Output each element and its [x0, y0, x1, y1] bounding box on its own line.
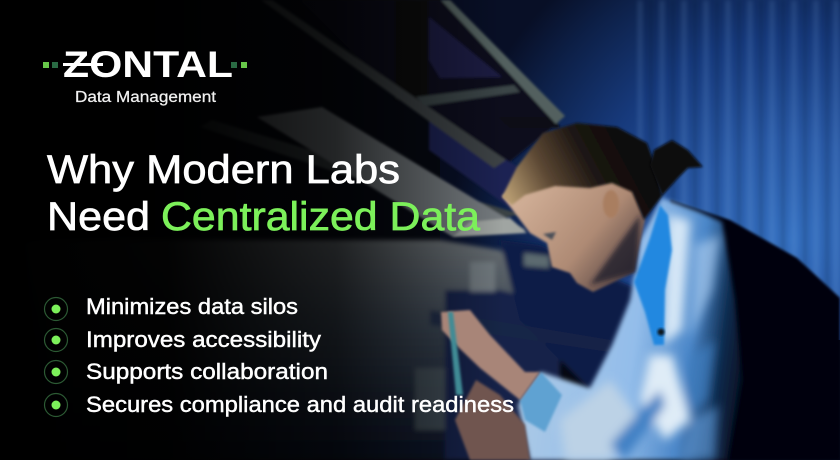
left logo dots: [43, 62, 58, 68]
lab coat: [518, 198, 742, 460]
neck shadow: [590, 215, 640, 285]
logo Z crossbar: [63, 63, 103, 66]
logo subtitle: Data Management: [75, 89, 217, 106]
logo: [43, 44, 247, 106]
blue collar: [634, 205, 672, 345]
bullet: compliance: Secures compliance and audit readiness: [86, 392, 514, 417]
bench and cabinets: [0, 240, 640, 460]
title: Centralized Data: [161, 195, 481, 239]
coat folds and highlights: [560, 215, 720, 460]
photo: scientist: [441, 123, 840, 460]
eye: [543, 232, 556, 240]
dark back and shoulders: [670, 200, 840, 460]
hair bun: [650, 140, 703, 196]
sleeve cuff: [520, 372, 562, 432]
bullet list: [44, 294, 514, 417]
title: Why Modern Labs: [47, 148, 400, 192]
title: Need: [47, 195, 150, 239]
right logo dots: [231, 62, 247, 68]
title: [47, 148, 481, 239]
shelving: [200, 0, 565, 237]
pen in pocket: [658, 328, 664, 336]
ear: [603, 190, 619, 218]
forearm and hands: [441, 310, 540, 460]
logo wordmark: ZONTAL: [63, 44, 233, 85]
bullet: accessibility: Improves accessibility: [86, 327, 321, 352]
neck and face: [502, 170, 645, 292]
bullet: collaboration: Supports collaboration: [86, 359, 328, 384]
hair: [502, 123, 662, 220]
bullet: data silos: Minimizes data silos: [86, 294, 298, 319]
test tube: [448, 312, 463, 395]
